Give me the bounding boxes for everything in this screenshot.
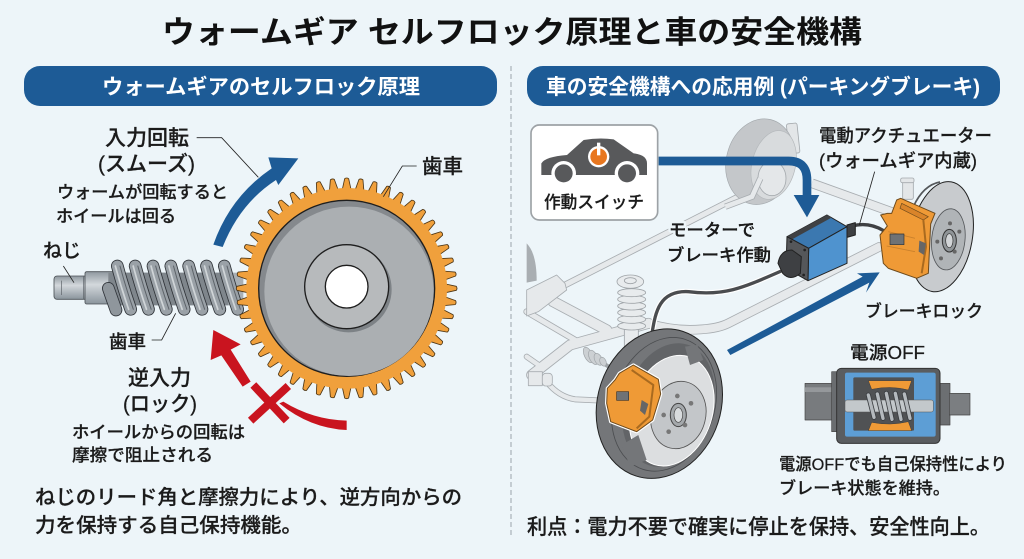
- drive shaft boot: [581, 346, 617, 372]
- text: left summary: ねじのリード角と摩擦力により、逆方向からの: [35, 486, 462, 509]
- icon: car with power button: [541, 138, 647, 186]
- label: electric actuator: [819, 126, 992, 171]
- power-off worm unit: [805, 368, 970, 443]
- heading: right panel: 車の安全機構への応用例 (パーキングブレーキ): [546, 75, 980, 99]
- front wheel with caliper: [577, 312, 741, 495]
- arrow: brake lock: [727, 272, 880, 355]
- chassis rail behind rear brake: [812, 183, 895, 213]
- arrow: smooth input rotation: [213, 157, 298, 247]
- text: power off explanation: ブレーキ状態を維持。: [779, 478, 950, 498]
- labels: input rotation: [56, 127, 228, 226]
- brake caliper: [607, 365, 661, 432]
- worm screw: [54, 266, 243, 310]
- arrow head: switch to motor: [794, 195, 819, 217]
- panel: worm gear self-lock principle: [24, 66, 497, 537]
- upper brake disc and caliper: [880, 177, 982, 297]
- leader lines: [63, 138, 417, 340]
- labels: input rotation: ホイールは回る: [56, 207, 176, 226]
- heading: left panel: ウォームギアのセルフロック原理: [102, 76, 420, 99]
- arrow: switch to motor: [659, 161, 807, 197]
- text: power off explanation: [779, 455, 1007, 498]
- label: motor operates brake: ブレーキ作動: [667, 245, 771, 265]
- labels: input rotation: (スムーズ): [98, 153, 195, 176]
- text: benefit summary: 利点：電力不要で確実に停止を保持、安全性向上。: [527, 516, 990, 539]
- gear wheel: [236, 178, 457, 399]
- labels: reverse input: [72, 367, 245, 465]
- icon: spring: [617, 275, 646, 352]
- labels: input rotation: ウォームが回転すると: [57, 182, 228, 202]
- arrow: blocked reverse input: [211, 330, 347, 430]
- label: switch: 作動スイッチ: [544, 193, 644, 212]
- rear wheel background: [717, 111, 804, 212]
- heading: right panel: [527, 66, 1000, 106]
- label: motor operates brake: ブレーキ作動: [667, 245, 771, 265]
- cable from actuator to front wheel: [619, 225, 884, 393]
- label: screw: ねじ: [43, 241, 81, 262]
- label: motor operates brake: [667, 221, 771, 265]
- label: motor operates brake: モーターで: [669, 221, 755, 240]
- text: left summary: 力を保持する自己保持機能。: [35, 514, 302, 537]
- diagram: rear wheel, switch, actuator: [531, 111, 895, 393]
- diagram: gear wheel and arrows: [63, 138, 457, 430]
- label: electric actuator: (ウォームギア内蔵): [819, 151, 977, 171]
- label: motor operates brake: モーターで: [669, 221, 755, 240]
- label: gear wheel: 歯車: [422, 155, 463, 178]
- label: power off: 電源OFF: [850, 343, 925, 363]
- heading: left panel: [24, 66, 497, 106]
- switch card: [531, 125, 658, 220]
- labels: input rotation: 入力回転: [105, 127, 189, 150]
- panel: car parking brake application: [527, 66, 1007, 539]
- label: brake lock: ブレーキロック: [865, 301, 983, 321]
- label: electric actuator: 電動アクチュエーター: [819, 126, 992, 146]
- labels: reverse input: (ロック): [123, 393, 197, 416]
- text: left summary: [35, 486, 462, 537]
- text: power off explanation: 電源OFFでも自己保持性により: [779, 455, 1007, 474]
- labels: reverse input: 逆入力: [128, 367, 191, 390]
- chassis background: [527, 193, 879, 401]
- leader line: actuator: [859, 172, 875, 225]
- actuator motor box: [778, 215, 855, 281]
- title: ウォームギア セルフロック原理と車の安全機構: [162, 15, 862, 50]
- labels: reverse input: 摩擦で阻止される: [72, 446, 213, 465]
- labels: reverse input: ホイールからの回転は: [72, 423, 245, 442]
- brake caliper: [880, 198, 935, 278]
- label: gear on worm: 歯車: [109, 332, 146, 352]
